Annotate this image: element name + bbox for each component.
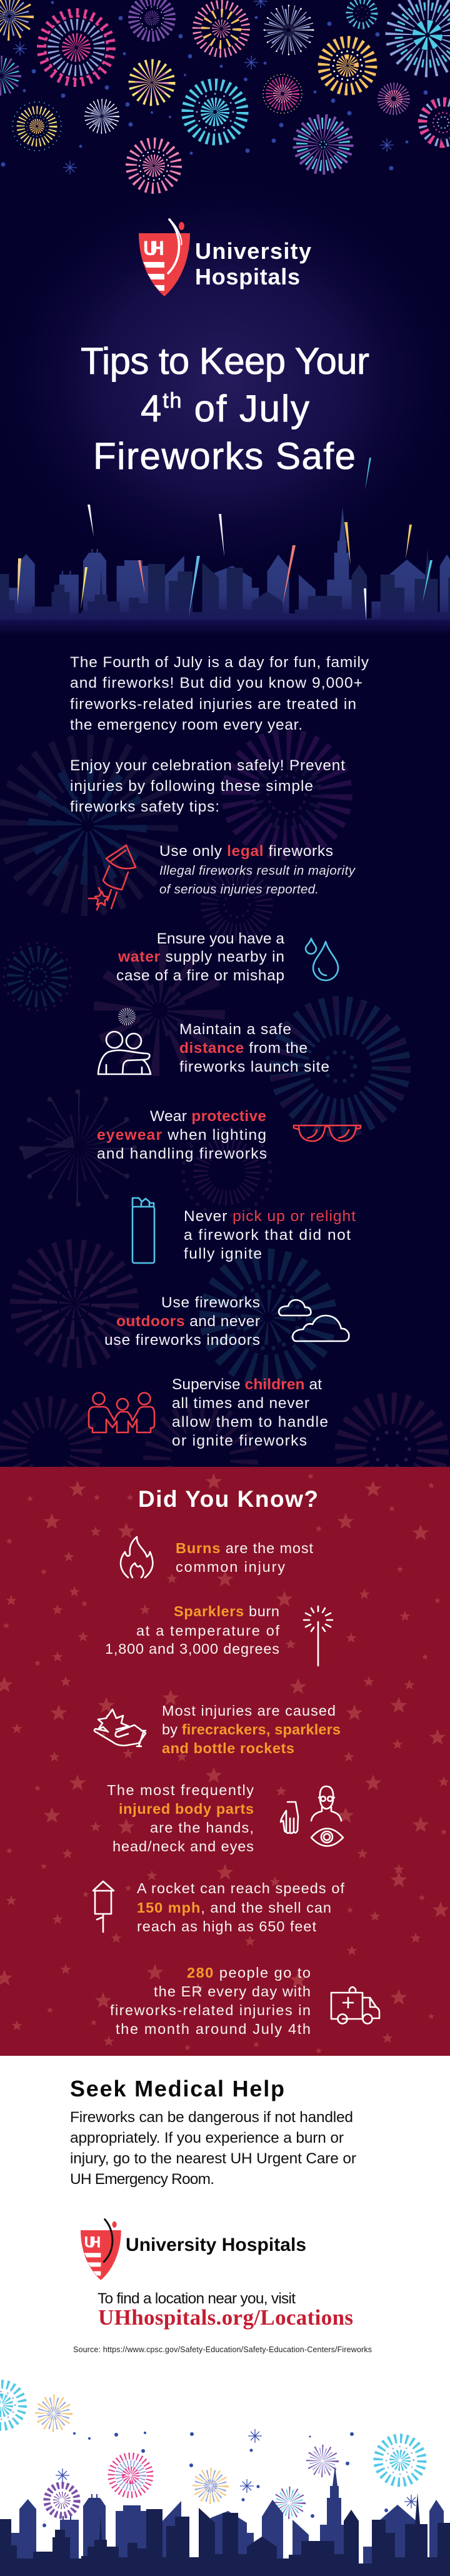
firework: white and periwinkle xyxy=(264,6,313,54)
icon: flame xyxy=(121,1537,152,1577)
logo: University Hospitals white: University xyxy=(195,238,311,264)
call to action: UHhospitals.org/Locations xyxy=(98,2305,353,2330)
fact: most injuries xyxy=(94,1703,341,1756)
intro text: the emergency room every year. xyxy=(70,717,302,733)
tip: supervise children: Supervise children at xyxy=(172,1376,322,1393)
blue stars and dots xyxy=(42,2429,418,2527)
tip: supervise children: allow them to handle xyxy=(172,1414,328,1431)
tip: water supply: case of a fire or mishap xyxy=(116,967,284,984)
icon: hand xyxy=(281,1802,298,1833)
tip: legal fireworks: Illegal fireworks result in majority xyxy=(159,863,356,878)
call to action: To find a location near you, visit xyxy=(98,2290,296,2307)
icon: clouds xyxy=(279,1300,349,1341)
tip: water supply: water supply nearby in xyxy=(118,948,284,965)
fact: ER visits: the month around July 4th xyxy=(116,2021,311,2037)
firework: cyan xyxy=(188,84,242,139)
tip: legal fireworks: of serious injuries reported. xyxy=(159,882,319,897)
body text: appropriately. If you experience a burn or xyxy=(70,2130,344,2146)
intro text: fireworks-related injuries are treated in xyxy=(70,696,356,713)
title: of July xyxy=(182,388,309,430)
fact: ER visits: the ER every day with xyxy=(154,1983,311,2000)
tip: protective eyewear: Wear protective xyxy=(150,1108,266,1125)
title xyxy=(81,340,369,477)
faint background fireworks xyxy=(4,746,433,1504)
tip: water supply: Ensure you have a xyxy=(157,930,284,947)
tip: water supply xyxy=(116,930,338,984)
tip: never relight: fully ignite xyxy=(184,1245,262,1262)
body text: Fireworks can be dangerous if not handled xyxy=(70,2109,353,2126)
tip: safe distance: distance from the xyxy=(179,1040,308,1057)
title: th xyxy=(162,389,181,413)
firework: yellow with cyan dots xyxy=(12,102,61,151)
panel: seek medical help xyxy=(0,2056,450,2576)
title: Fireworks Safe xyxy=(93,435,356,477)
firework: yellow and pink xyxy=(139,70,164,95)
intro text: and fireworks! But did you know 9,000+ xyxy=(70,675,362,692)
intro text: fireworks safety tips: xyxy=(70,798,219,815)
firework: cyan left edge xyxy=(0,2384,22,2427)
tip: legal fireworks: Use only legal fireworks xyxy=(159,843,333,860)
logo: University Hospitals black xyxy=(81,2220,306,2280)
icon: rocket xyxy=(93,1881,114,1932)
fact: rocket speed: reach as high as 650 feet xyxy=(137,1918,316,1935)
tip: safe distance xyxy=(98,1012,329,1075)
icon: ambulance xyxy=(331,1987,379,2019)
firework: gold and blue top left xyxy=(0,1,24,31)
firework: cyan right xyxy=(378,2438,422,2482)
falling sparks xyxy=(18,458,432,621)
fact: body parts: injured body parts xyxy=(119,1801,254,1817)
logo: University Hospitals white: Hospitals xyxy=(195,264,300,289)
icon: water drops xyxy=(306,938,338,980)
firework: purple and cyan low xyxy=(281,2494,298,2512)
firework: purple with white dots xyxy=(134,0,170,36)
firework: pink and periwinkle xyxy=(111,2456,150,2495)
tip: supervise children xyxy=(89,1376,328,1449)
fact: sparklers: Sparklers burn xyxy=(174,1603,279,1619)
heading: Did You Know? xyxy=(138,1486,318,1512)
fact: burns: Burns are the most xyxy=(176,1540,313,1556)
fact: body parts xyxy=(107,1782,343,1854)
firework: purple and periwinkle xyxy=(314,2452,331,2470)
fact: body parts: are the hands, xyxy=(150,1819,254,1836)
fact: ER visits xyxy=(110,1965,379,2037)
fact: sparklers: 1,800 and 3,000 degrees xyxy=(105,1641,279,1657)
fact: most injuries: Most injuries are caused xyxy=(162,1703,336,1719)
tip: outdoors: Use fireworks xyxy=(161,1294,260,1311)
fact: rocket speed: 150 mph, and the shell can xyxy=(137,1899,331,1916)
intro text: injuries by following these simple xyxy=(70,778,313,795)
icon: family group xyxy=(89,1393,154,1432)
firework: pink and gold xyxy=(197,4,246,53)
icon: spark over two people xyxy=(98,1012,151,1074)
fact: most injuries: by firecrackers, sparklers xyxy=(162,1721,341,1738)
tip: safe distance: fireworks launch site xyxy=(179,1059,329,1075)
icon: lighter xyxy=(132,1198,154,1263)
source: Source: https://www.cpsc.gov/Safety-Education/Safety-Education-Centers/Fireworks xyxy=(73,2345,372,2354)
fact: body parts: The most frequently xyxy=(107,1782,254,1798)
title: 4 xyxy=(141,388,161,430)
tip: never relight: Never pick up or relight xyxy=(184,1208,356,1225)
firework: small cyan and pink xyxy=(346,0,378,29)
call to action xyxy=(98,2290,353,2330)
firework: gold and periwinkle xyxy=(43,2403,64,2424)
intro text: Enjoy your celebration safely! Prevent xyxy=(70,757,345,774)
panel: night sky background xyxy=(0,0,450,1467)
fact: ER visits: fireworks-related injuries in xyxy=(110,2002,311,2018)
tip: safe distance: Maintain a safe xyxy=(179,1021,291,1038)
fireworks cluster at top xyxy=(0,0,450,188)
firework: pink with yellow dots xyxy=(263,74,302,113)
firework: purple and cyan left edge xyxy=(0,65,12,86)
icon: firework rocket xyxy=(89,845,136,910)
tip: protective eyewear: eyewear when lighting xyxy=(97,1127,266,1144)
tip: supervise children: or ignite fireworks xyxy=(172,1432,307,1449)
firework: white and periwinkle small xyxy=(92,106,112,126)
fact: rocket speed xyxy=(93,1880,344,1935)
icon: eye xyxy=(311,1828,343,1846)
fact: most injuries: and bottle rockets xyxy=(162,1740,294,1756)
firework: gold and periwinkle center xyxy=(201,2476,221,2496)
pattern of stars xyxy=(0,1473,449,2053)
firework: purple xyxy=(47,2485,77,2515)
icon: glasses xyxy=(294,1125,361,1141)
body text xyxy=(70,2109,356,2188)
tip: never relight xyxy=(132,1198,356,1263)
fact: rocket speed: A rocket can reach speeds of xyxy=(137,1880,344,1896)
tip: protective eyewear xyxy=(97,1108,361,1162)
firework: small pink and purple xyxy=(382,87,406,111)
firework: gold and white xyxy=(324,42,371,89)
icon: head with glasses xyxy=(311,1786,341,1821)
icon: sparkler xyxy=(304,1606,332,1666)
panel: did you know xyxy=(0,1467,450,2056)
firework: pink and white dots xyxy=(131,143,176,188)
skyline illustration xyxy=(0,506,450,636)
skyline at bottom xyxy=(0,2466,450,2576)
body text: injury, go to the nearest UH Urgent Care or xyxy=(70,2150,356,2167)
logo: University Hospitals white xyxy=(139,219,311,296)
logo: University Hospitals white: UH xyxy=(143,237,164,259)
fireworks over bottom skyline xyxy=(0,2384,422,2527)
tip: outdoors: use fireworks indoors xyxy=(104,1332,260,1349)
fact: sparklers: at a temperature of xyxy=(136,1623,279,1639)
intro text: The Fourth of July is a day for fun, family xyxy=(70,654,369,671)
fact: ER visits: 280 people go to xyxy=(187,1965,311,1981)
firework: large periwinkle and cyan xyxy=(399,6,450,64)
fact: burns: common injury xyxy=(176,1559,285,1575)
logo: University Hospitals black: University Hospitals xyxy=(126,2235,306,2255)
tip: legal fireworks xyxy=(89,843,356,910)
intro text xyxy=(70,654,369,815)
icon: burst over hand xyxy=(94,1709,146,1746)
firework: pink and blue right edge xyxy=(422,102,450,143)
heading: Seek Medical Help xyxy=(70,2076,284,2101)
tip: supervise children: all times and never xyxy=(172,1395,309,1412)
fact: body parts: head/neck and eyes xyxy=(112,1838,254,1854)
title: Tips to Keep Your xyxy=(81,340,369,382)
stars and dots in the sky xyxy=(1,0,428,174)
tip: outdoors: outdoors and never xyxy=(116,1313,260,1330)
body text: UH Emergency Room. xyxy=(70,2171,214,2188)
tip: never relight: a firework that did not xyxy=(184,1227,351,1244)
tip: protective eyewear: and handling fireworks xyxy=(97,1145,267,1162)
firework: purple and cyan xyxy=(302,123,344,166)
fact: sparklers xyxy=(105,1603,332,1666)
tip: outdoors xyxy=(104,1294,349,1349)
fact: burns xyxy=(121,1537,313,1577)
firework: large pink and periwinkle xyxy=(41,13,111,83)
logo: University Hospitals black: UH xyxy=(84,2234,101,2251)
